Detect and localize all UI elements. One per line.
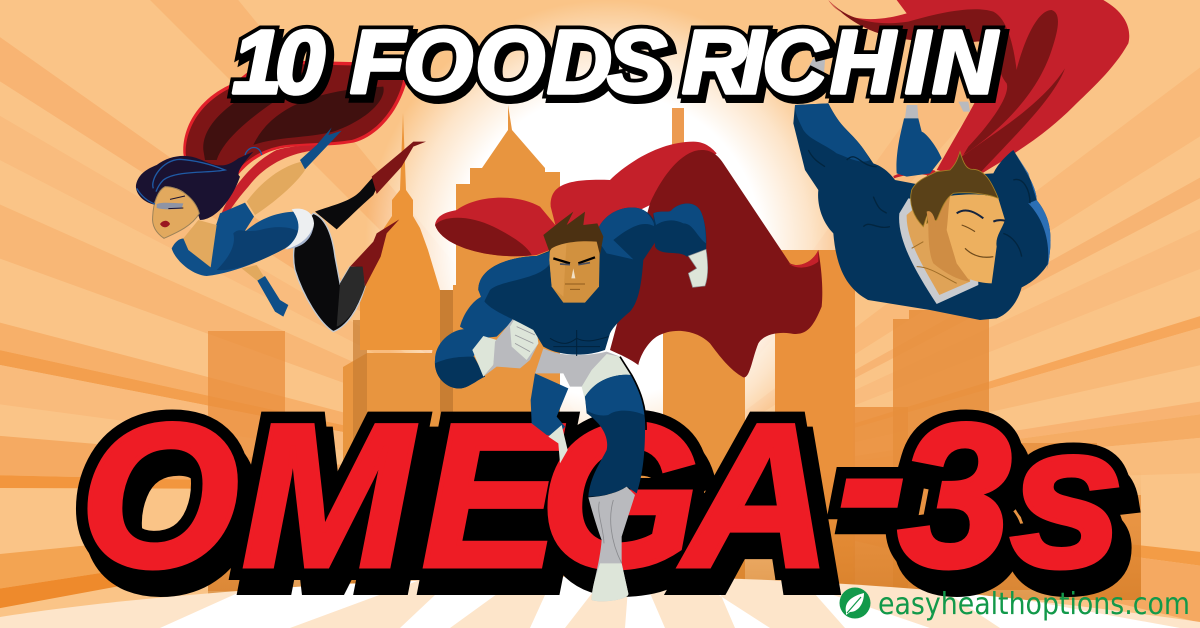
right arm <box>653 204 708 287</box>
headline: Omega-3s: OMEGA-3s <box>80 362 1123 610</box>
title: 10 Foods Rich In: 10FOODSRICHIN <box>236 17 1003 117</box>
shorts <box>535 348 632 407</box>
flying hero legs and boots <box>803 58 970 177</box>
woman arms <box>242 127 342 317</box>
logo leaf icon <box>840 588 870 618</box>
left arm <box>435 297 538 389</box>
main superhero body <box>435 204 708 601</box>
woman superhero <box>136 60 426 332</box>
boot <box>588 487 635 601</box>
woman face <box>153 187 199 238</box>
flying hero head <box>911 152 1005 283</box>
main superhero cape <box>435 142 822 377</box>
woman suit <box>172 203 314 276</box>
title: 10 Foods Rich In: 10FOODSRICHIN <box>232 13 999 113</box>
woman cape <box>183 60 410 228</box>
headline: Omega-3s: OMEGA-3s <box>88 377 1131 625</box>
logo: easyhealthoptions.com <box>840 587 1190 622</box>
flying superhero <box>793 0 1129 320</box>
front leg <box>585 357 646 497</box>
woman front leg and boot <box>294 213 399 332</box>
flying hero body <box>793 103 1051 320</box>
hero head <box>543 212 603 303</box>
city skyline <box>208 105 1141 600</box>
back leg <box>531 373 568 463</box>
flying hero cape <box>828 0 1129 185</box>
flying hero collar and chest <box>899 198 978 304</box>
torso <box>478 207 657 356</box>
ground with rays <box>0 576 1200 628</box>
headline: Omega-3s: OMEGA-3s <box>80 362 1123 610</box>
woman back leg and boot <box>315 142 426 229</box>
title: 10 Foods Rich In: 10FOODSRICHIN <box>232 13 999 113</box>
woman hair lines <box>137 147 262 204</box>
woman hair back <box>136 152 253 220</box>
woman chest and neck <box>183 220 217 267</box>
